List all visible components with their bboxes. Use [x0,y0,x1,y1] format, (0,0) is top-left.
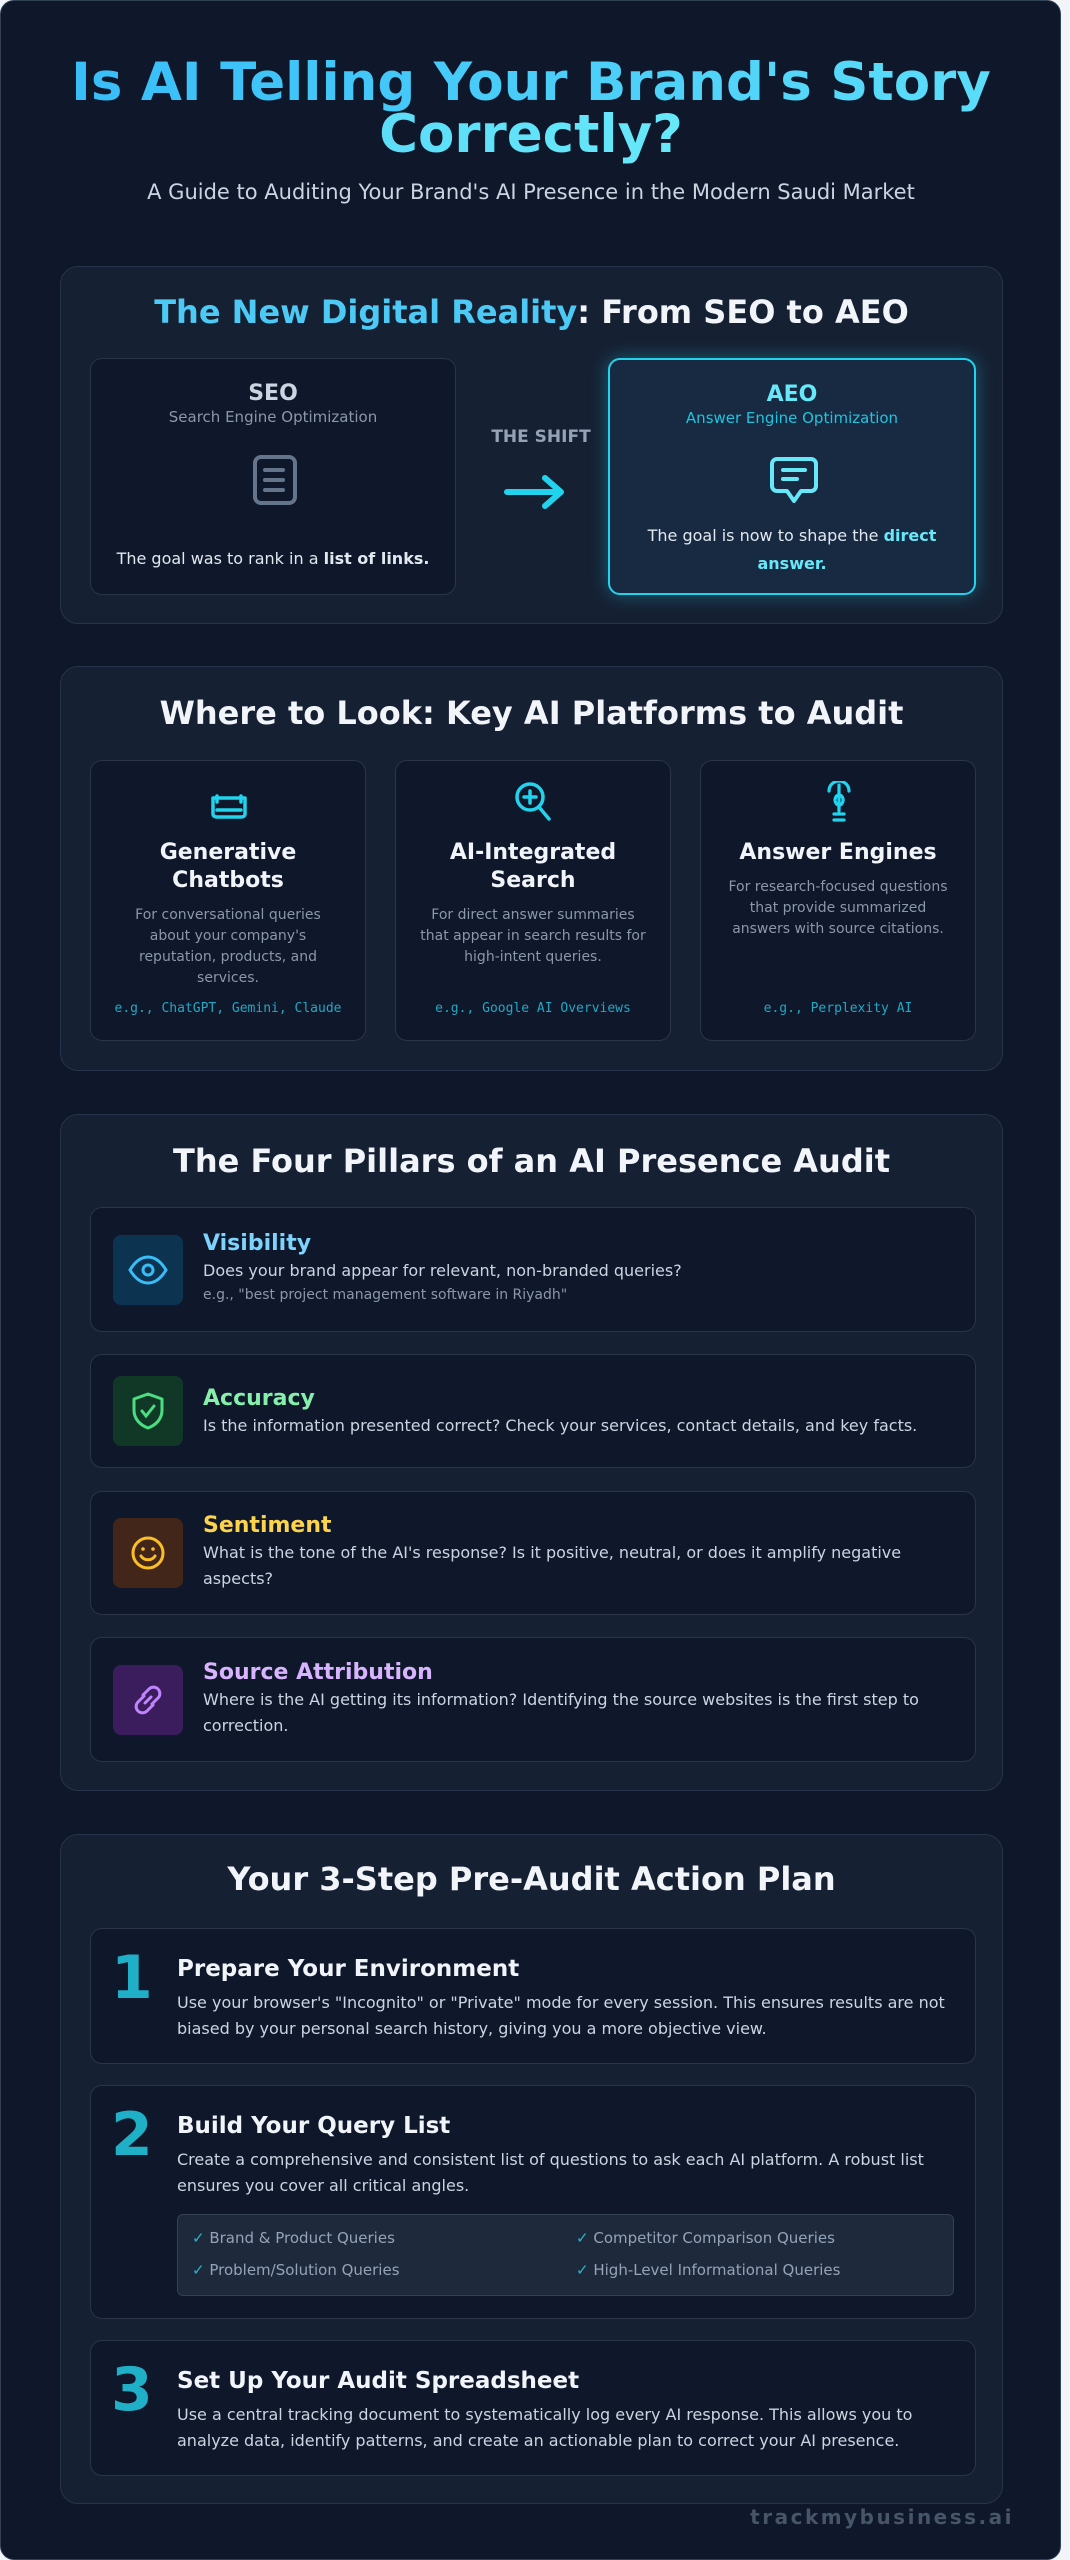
SEO card: SEO [248,381,298,406]
step 3 [90,2340,976,2476]
card: chatbots: For conversational queries about your company's reputation, products, and services. [135,907,321,986]
pillar: sentiment [90,1491,976,1615]
pillar: source attribution: Where is the AI getting its information? Identifying the source websites is the first step to correction. [203,1690,919,1735]
checklist: ✓ Problem/Solution Queries [192,2261,400,2279]
pillar: visibility: Does your brand appear for relevant, non-branded queries? [203,1261,682,1280]
pillar: source attribution [90,1637,976,1762]
label: the shift: THE SHIFT [491,427,591,447]
step 1: Use your browser's "Incognito" or "Private" mode for every session. This ensures results are not biased by your personal search history, giving you a more objective view. [177,1993,945,2038]
icon: chat bubble [770,457,818,504]
step 3: 3 [111,2355,153,2425]
card: answer engines: e.g., Perplexity AI [764,1001,912,1016]
panel: action plan [60,1834,1003,2504]
pillar: source attribution: Source Attribution [203,1660,433,1685]
step 3: Set Up Your Audit Spreadsheet [177,2368,579,2394]
subtitle: A Guide to Auditing Your Brand's AI Presence in the Modern Saudi Market [147,180,915,204]
SEO card: Search Engine Optimization [169,408,377,426]
icon: chatbot [211,794,247,819]
card: answer engines [700,760,976,1041]
title [71,52,991,165]
card: chatbots: e.g., ChatGPT, Gemini, Claude [114,1001,341,1016]
footer brand: trackmybusiness.ai [750,2505,1014,2529]
card: AI search: Search [490,868,576,893]
pillar: accuracy: Accuracy [203,1386,315,1411]
pillar: accuracy [90,1354,976,1468]
checklist: ✓ High-Level Informational Queries [576,2261,840,2279]
pillar: visibility: Visibility [203,1231,311,1256]
card: answer engines: Answer Engines [739,840,937,865]
arrow [504,475,564,509]
card: chatbots: Generative [160,840,296,865]
heading: Where to Look: Key AI Platforms to Audit [160,694,903,732]
heading: The New Digital Reality: From SEO to AEO [154,293,909,331]
AEO card: The goal is now to shape the direct answer. [648,526,936,573]
panel: SEO to AEO [60,266,1003,624]
step 2: 2 [111,2100,153,2170]
pillar: accuracy: Is the information presented correct? Check your services, contact details, and key facts. [203,1416,917,1435]
step 1: Prepare Your Environment [177,1956,519,1982]
icon: document [253,455,297,505]
AEO card [608,358,976,595]
panel: four pillars [60,1114,1003,1791]
card: chatbots [90,760,366,1041]
heading: The Four Pillars of an AI Presence Audit [173,1142,890,1180]
AEO card: AEO [767,382,817,407]
card: AI search: e.g., Google AI Overviews [435,1001,631,1016]
card: answer engines: For research-focused questions that provide summarized answers with source citations. [728,879,948,937]
pillar: visibility: e.g., "best project management software in Riyadh" [203,1287,567,1303]
title: Is AI Telling Your Brand's Story [71,52,991,113]
card: AI search [395,760,671,1041]
pillar: sentiment: What is the tone of the AI's response? Is it positive, neutral, or does it amplify negative aspects? [203,1543,901,1588]
step 1: 1 [111,1943,153,2013]
step 1 [90,1928,976,2064]
step 2: Create a comprehensive and consistent list of questions to ask each AI platform. A robust list ensures you cover all critical angles. [177,2150,924,2195]
checklist [177,2214,954,2296]
SEO card [90,358,456,595]
title: Correctly? [379,104,683,165]
pillar: sentiment: Sentiment [203,1513,332,1538]
card: chatbots: Chatbots [172,868,284,893]
step 3: Use a central tracking document to systematically log every AI response. This allows you to analyze data, identify patterns, and create an actionable plan to correct your AI presence. [177,2405,912,2450]
pillar: visibility [90,1207,976,1332]
AEO card: Answer Engine Optimization [686,409,898,427]
icon: magnifier plus [515,782,551,821]
step 2: Build Your Query List [177,2113,450,2139]
card: AI search: For direct answer summaries that appear in search results for high‑intent queries. [420,907,646,965]
checklist: ✓ Brand & Product Queries [192,2229,395,2247]
step 2 [90,2085,976,2319]
heading: Your 3-Step Pre-Audit Action Plan [227,1860,836,1898]
icon: pen nib [827,781,851,822]
checklist: ✓ Competitor Comparison Queries [576,2229,835,2247]
panel: platforms [60,666,1003,1071]
SEO card: The goal was to rank in a list of links. [117,549,429,568]
card: AI search: AI-Integrated [450,840,616,865]
